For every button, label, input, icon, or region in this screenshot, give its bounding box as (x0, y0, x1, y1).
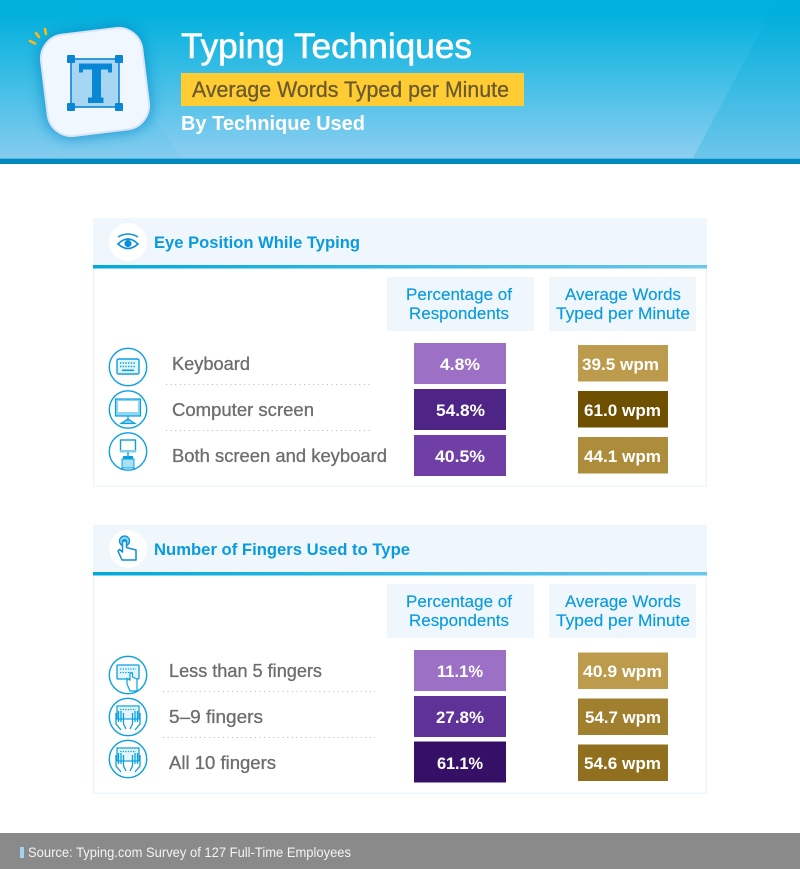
row label: both: Both screen and keyboard (172, 446, 387, 466)
percentage bar: keyboard (414, 343, 506, 384)
icon: text tool tile (30, 23, 154, 141)
icon: screen and keyboard (109, 433, 147, 470)
wpm bar: 5-9: 54.7 wpm (585, 709, 661, 727)
percentage bar: computer screen (414, 389, 506, 430)
column heading: percentage: Percentage of (406, 592, 512, 611)
row label: computer screen: Computer screen (172, 400, 314, 420)
wpm bar: less than 5: 40.9 wpm (583, 663, 662, 681)
column heading: wpm: Typed per Minute (556, 611, 690, 630)
percentage bar: keyboard: 4.8% (440, 356, 480, 374)
wpm bar: all 10 (578, 744, 668, 781)
column heading: percentage (387, 277, 534, 331)
icon: pointing hand (109, 530, 147, 568)
percentage bar: both (414, 435, 506, 476)
percentage bar: 5-9 (414, 696, 506, 737)
column heading: percentage (387, 584, 534, 638)
icon: two hands, all fingers (109, 740, 147, 778)
row label: 5-9: 5–9 fingers (169, 707, 263, 727)
row label: less than 5: Less than 5 fingers (169, 661, 322, 681)
icon: eye (109, 223, 147, 261)
column heading: wpm (549, 584, 696, 638)
footer source (0, 833, 800, 869)
column heading: percentage: Respondents (409, 304, 509, 323)
percentage bar: all 10: 61.1% (437, 755, 483, 773)
icon: monitor (109, 391, 147, 428)
wpm bar: computer screen (578, 391, 668, 428)
wpm bar: both (578, 437, 668, 474)
percentage bar: less than 5: 11.1% (437, 663, 483, 681)
wpm bar: less than 5 (578, 652, 668, 689)
header banner (0, 0, 800, 164)
icon: two hands, 5-9 fingers (109, 698, 147, 736)
percentage bar: less than 5 (414, 650, 506, 691)
wpm bar: all 10: 54.6 wpm (584, 755, 661, 773)
wpm bar: keyboard (578, 345, 668, 382)
wpm bar: both: 44.1 wpm (584, 448, 661, 466)
column heading: wpm: Typed per Minute (556, 304, 690, 323)
wpm bar: 5-9 (578, 698, 668, 735)
column heading: wpm: Average Words (565, 285, 681, 304)
panel heading: Eye Position While Typing (154, 233, 360, 252)
panel: eye position (93, 218, 707, 486)
column heading: percentage: Percentage of (406, 285, 512, 304)
percentage bar: 5-9: 27.8% (436, 709, 484, 727)
panel heading: Number of Fingers Used to Type (154, 540, 410, 559)
percentage bar: all 10 (414, 742, 506, 782)
panel: number of fingers (93, 525, 707, 793)
icon: one hand on keyboard (109, 656, 147, 694)
subheading: By Technique Used (181, 113, 365, 135)
wpm bar: computer screen: 61.0 wpm (584, 402, 661, 420)
percentage bar: both: 40.5% (435, 448, 485, 466)
footer source: Source: Typing.com Survey of 127 Full-Time Employees (28, 845, 351, 860)
icon: keyboard (109, 348, 147, 386)
percentage bar: computer screen: 54.8% (436, 402, 485, 420)
column heading: wpm: Average Words (565, 592, 681, 611)
title: Typing Techniques (181, 27, 472, 66)
column heading: wpm (549, 277, 696, 331)
row label: all 10: All 10 fingers (169, 753, 276, 773)
subtitle highlight: Average Words Typed per Minute (192, 77, 509, 102)
row label: keyboard: Keyboard (172, 354, 250, 374)
wpm bar: keyboard: 39.5 wpm (582, 356, 659, 374)
column heading: percentage: Respondents (409, 611, 509, 630)
